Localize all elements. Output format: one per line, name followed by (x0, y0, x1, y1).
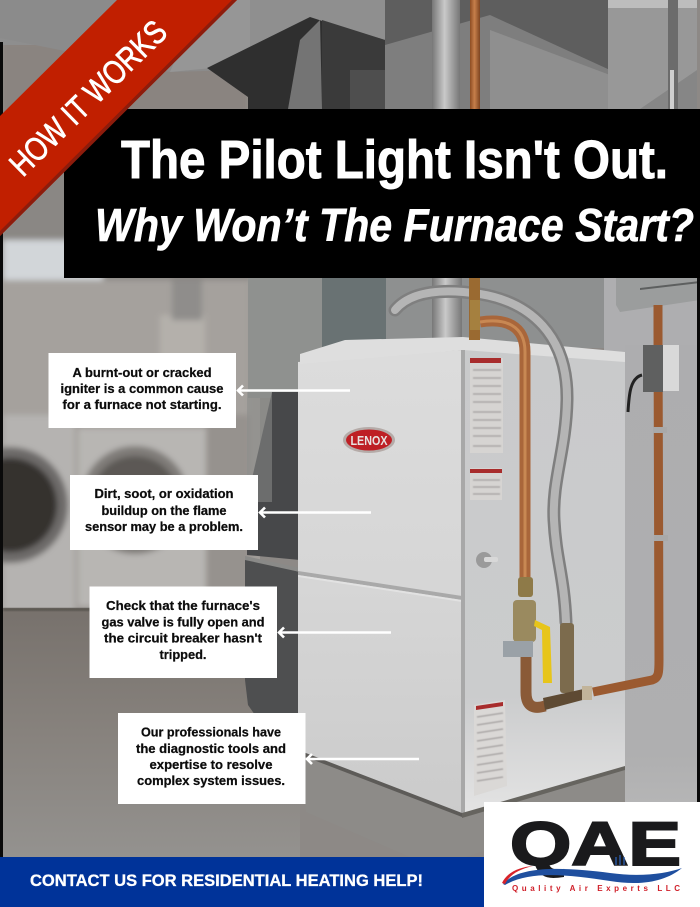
door latch (476, 552, 498, 568)
callout 2: flame sensor: sensor may be a problem. (85, 520, 243, 534)
callout 4: professionals: Our professionals have (141, 726, 281, 740)
logo letters: QAE (510, 810, 681, 878)
Lenox badge: LENOX (350, 433, 388, 448)
title banner (64, 109, 700, 278)
copper and brass gas pipes (469, 278, 679, 710)
arrow 1 (238, 386, 350, 396)
callout 3: gas valve: the circuit breaker hasn't (104, 632, 263, 646)
logo tagline: Quality Air Experts LLC (512, 884, 680, 893)
ribbon: how it works (0, 0, 237, 236)
warning labels (470, 358, 507, 796)
callout 1: igniter: igniter is a common cause (60, 382, 224, 396)
callout 4: professionals (118, 713, 306, 804)
electrical panel top right (616, 278, 700, 312)
contact footer bar: CONTACT US FOR RESIDENTIAL HEATING HELP! (30, 871, 423, 890)
callout 3: gas valve: gas valve is fully open and (102, 616, 264, 630)
top cap (300, 337, 625, 364)
callout 4: professionals: complex system issues. (137, 774, 285, 788)
arrow 2 (260, 508, 371, 518)
room background: wall, laundry machines and floor (0, 0, 300, 858)
furnace cabinet (298, 337, 625, 818)
logo: Quality Air Experts (484, 802, 700, 907)
callout 3: gas valve (90, 586, 277, 678)
callout 1: igniter (48, 353, 236, 428)
arrow 4 (307, 754, 419, 764)
callout 2: flame sensor: buildup on the flame (102, 504, 226, 518)
arrow 3 (279, 628, 391, 638)
junction box on wall (628, 345, 679, 541)
callout 3: gas valve: tripped. (160, 648, 206, 662)
furnace base (298, 752, 625, 857)
callout 3: gas valve: Check that the furnace's (106, 599, 260, 613)
brass fittings (470, 300, 592, 710)
flexible gas line (395, 291, 567, 622)
upper door seam (298, 571, 462, 600)
brass valve (503, 577, 552, 683)
Lenox badge (343, 427, 395, 453)
callout 2: flame sensor (70, 475, 258, 550)
ductwork at top (0, 0, 697, 109)
callout 1: igniter: for a furnace not starting. (62, 398, 222, 412)
callout 4: professionals: expertise to resolve (150, 758, 272, 772)
logo swoosh (502, 855, 682, 885)
callout 4: professionals: the diagnostic tools and (136, 742, 286, 756)
callout 1: igniter: A burnt-out or cracked (72, 366, 212, 380)
wall column behind furnace (245, 278, 700, 857)
callout 2: flame sensor: Dirt, soot, or oxidation (94, 487, 234, 501)
side vertical trim (461, 350, 465, 815)
contact footer bar (0, 857, 485, 907)
